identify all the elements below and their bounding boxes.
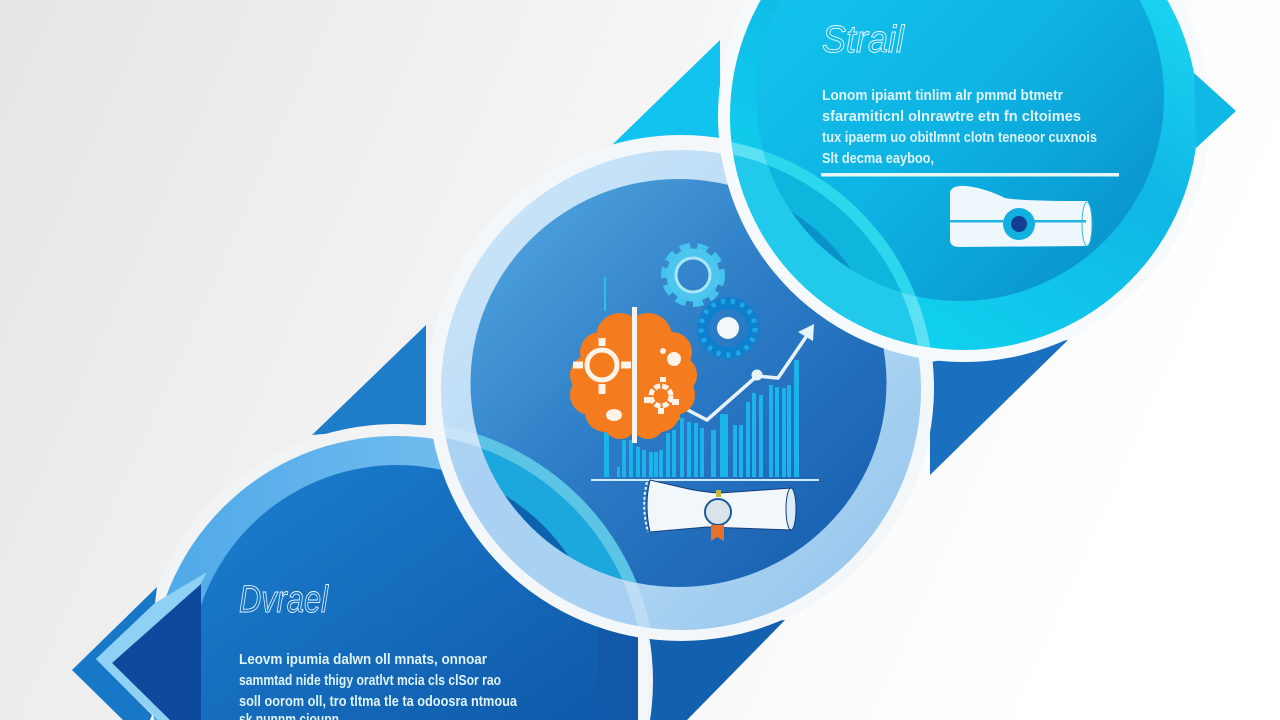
icon: dark gear xyxy=(701,301,755,355)
arrow: bottom circle right triangle xyxy=(648,620,785,720)
arrow: left pointer xyxy=(72,572,207,720)
arrow: middle circle left triangle xyxy=(312,325,426,435)
text block: top panel xyxy=(822,88,1097,167)
divider rule xyxy=(821,173,1119,176)
text block: top panel: sfaramiticnl olnrawtre etn fn cltoimes xyxy=(822,109,1081,125)
text block: top panel: tux ipaerm uo obitlmnt clotn teneoor cuxnois xyxy=(822,130,1097,146)
icon: scroll xyxy=(950,186,1092,247)
heading: top panel: Strail xyxy=(822,19,905,61)
arrow: top circle right pointer xyxy=(1194,73,1236,148)
icon: diploma scroll xyxy=(644,480,796,541)
panel: top circle xyxy=(718,0,1236,362)
panel: bottom circle xyxy=(72,424,653,720)
text block: bottom panel xyxy=(239,652,518,720)
bottom circle seen through middle ring xyxy=(444,426,650,628)
arrow: top circle left triangle xyxy=(612,40,720,145)
icon: light gear xyxy=(665,247,721,303)
text block: bottom panel: soll oorom oll, tro tltma tle ta odoosra ntmoua xyxy=(239,694,518,710)
text block: top panel: Lonom ipiamt tinlim alr pmmd btmetr xyxy=(822,88,1063,104)
middle circle seen through top inner disc xyxy=(763,151,916,296)
middle circle seen through top ring xyxy=(732,142,930,348)
trend line with arrow xyxy=(682,324,814,420)
bottom circle seen through middle inner disc xyxy=(477,434,637,583)
arrow: middle circle right triangle xyxy=(930,340,1068,475)
heading: bottom panel: Dvrael xyxy=(239,579,329,621)
chart: bar chart xyxy=(604,277,799,477)
text block: top panel: Slt decma eayboo, xyxy=(822,151,934,167)
chart axis line xyxy=(591,479,819,481)
white divider beside the triangle xyxy=(638,610,648,720)
lower right ring section xyxy=(598,600,638,720)
text block: bottom panel: sammtad nide thigy oratlvt mcia cls clSor rao xyxy=(239,673,501,689)
icon: orange brain xyxy=(570,307,697,443)
panel: middle circle xyxy=(433,135,934,641)
text block: bottom panel: Leovm ipumia dalwn oll mnats, onnoar xyxy=(239,652,487,668)
